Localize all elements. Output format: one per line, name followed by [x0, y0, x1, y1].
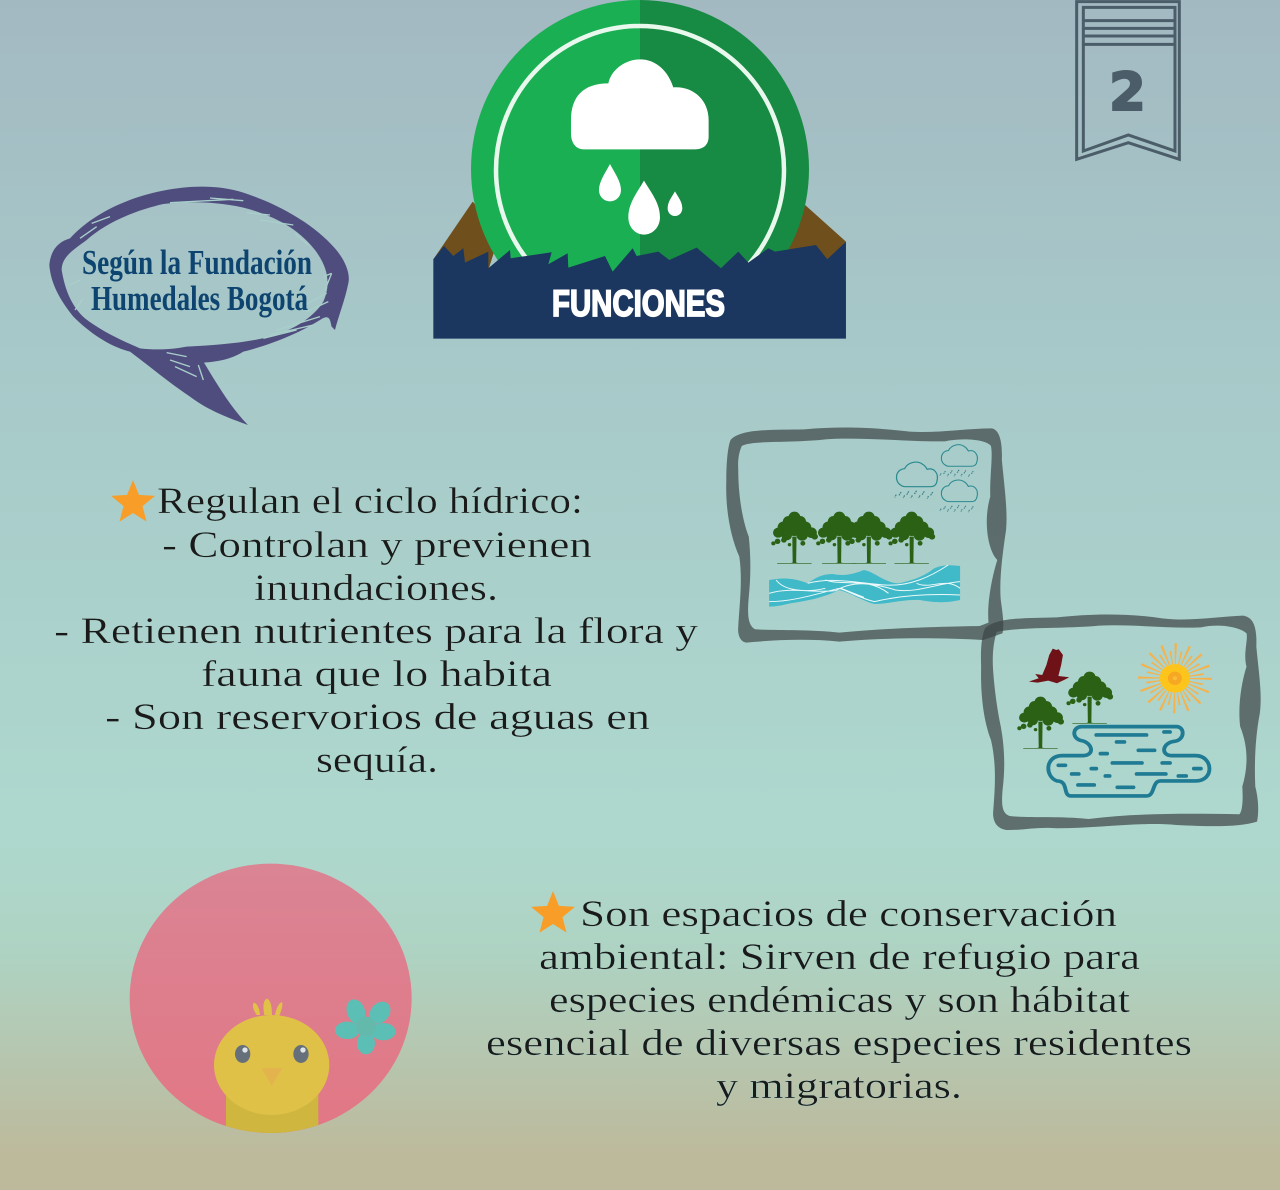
text block: espacios de conservacion: ambiental: Sirven de refugio para — [539, 937, 1140, 978]
text block: espacios de conservacion: especies endémicas y son hábitat — [549, 980, 1131, 1021]
brush outline — [49, 187, 349, 425]
frame — [726, 428, 1007, 643]
text block: espacios de conservacion — [486, 894, 1192, 1107]
panel: chick illustration — [130, 864, 412, 1137]
text block: regulan el ciclo hidrico: sequía. — [316, 740, 438, 781]
icon: mountains — [433, 202, 846, 270]
icon: row of trees — [771, 512, 935, 564]
bubble text — [82, 243, 312, 318]
bubble text: Según la Fundación — [82, 243, 312, 282]
green circle — [471, 0, 809, 338]
icon: rain cloud — [571, 59, 709, 235]
icon: sun — [1148, 653, 1201, 703]
text block: espacios de conservacion: y migratorias. — [716, 1066, 962, 1107]
ribbon: number 2 — [1077, 2, 1179, 159]
speech bubble — [49, 187, 349, 425]
bubble text: Humedales Bogotá — [91, 279, 308, 318]
text block: espacios de conservacion: Son espacios de conservación — [580, 894, 1117, 935]
text block: regulan el ciclo hidrico: Regulan el ciclo hídrico: — [157, 481, 583, 522]
icon: water waves — [769, 565, 960, 607]
text block: regulan el ciclo hidrico: fauna que lo habita — [201, 654, 552, 695]
icon: rain clouds — [895, 445, 977, 512]
text block: regulan el ciclo hidrico: inundaciones. — [254, 568, 498, 609]
text block: regulan el ciclo hidrico: - Son reservorios de aguas en — [105, 697, 650, 738]
icon: trees — [1017, 672, 1113, 749]
icon: chick — [214, 999, 329, 1137]
ribbon: number 2: 2 — [1109, 62, 1146, 123]
icon: eagle — [1029, 649, 1069, 683]
text block: regulan el ciclo hidrico: - Controlan y previenen — [162, 525, 592, 566]
panel: rainy scene — [726, 428, 1007, 643]
star bullet 1 — [111, 480, 155, 522]
panel: dry scene — [981, 614, 1261, 830]
heading: funciones: FUNCIONES — [552, 283, 725, 324]
star bullet 2 — [531, 891, 575, 933]
text block: regulan el ciclo hidrico — [54, 481, 699, 781]
text block: regulan el ciclo hidrico: - Retienen nutrientes para la flora y — [54, 611, 699, 652]
pink circle — [130, 864, 412, 1133]
icon: flower — [335, 997, 396, 1054]
navy banner with grass edge — [433, 242, 846, 339]
icon: pond — [1048, 727, 1209, 796]
emblem: funciones badge — [433, 0, 846, 339]
text block: espacios de conservacion: esencial de diversas especies residentes — [486, 1023, 1192, 1064]
frame — [981, 614, 1261, 830]
